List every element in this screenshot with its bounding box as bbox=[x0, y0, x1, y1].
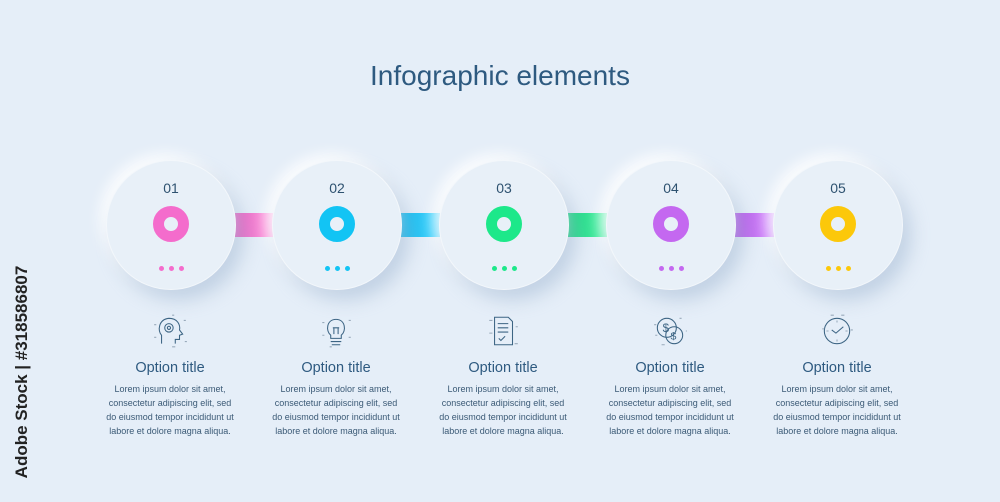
watermark side text: Adobe Stock | #318586807 bbox=[12, 266, 31, 478]
icon: coins: $ bbox=[671, 330, 677, 342]
connector 1-2 bbox=[233, 213, 275, 237]
option 1 text bbox=[106, 360, 234, 436]
step 04: 04 bbox=[663, 180, 679, 196]
step 01 bbox=[106, 160, 236, 290]
icon: bulb bbox=[322, 318, 351, 348]
text: Option title bbox=[135, 360, 205, 376]
text: Lorem ipsum dolor sit amet, consectetur adipiscing elit, sed do eiusmod tempor incididunt ut labore et dolore magna aliqua. bbox=[439, 384, 567, 436]
icon: coins bbox=[654, 318, 687, 346]
step 02: 02 bbox=[329, 180, 345, 196]
option 5 text bbox=[773, 360, 901, 436]
step 03: 03 bbox=[496, 180, 512, 196]
icon: document bbox=[489, 316, 518, 346]
step 04 bbox=[606, 160, 736, 290]
text: Lorem ipsum dolor sit amet, consectetur adipiscing elit, sed do eiusmod tempor incididunt ut labore et dolore magna aliqua. bbox=[606, 384, 734, 436]
text: Lorem ipsum dolor sit amet, consectetur adipiscing elit, sed do eiusmod tempor incididunt ut labore et dolore magna aliqua. bbox=[272, 384, 400, 436]
text: Lorem ipsum dolor sit amet, consectetur adipiscing elit, sed do eiusmod tempor incididunt ut labore et dolore magna aliqua. bbox=[773, 384, 901, 436]
icon: head gear bbox=[154, 314, 187, 348]
icon: clock bbox=[822, 314, 853, 344]
text: Option title bbox=[802, 360, 872, 376]
step 05: 05 bbox=[830, 180, 846, 196]
step 02 bbox=[272, 160, 402, 290]
text: Option title bbox=[301, 360, 371, 376]
text: Option title bbox=[468, 360, 538, 376]
title: Infographic elements bbox=[370, 60, 630, 91]
step 05 bbox=[773, 160, 903, 290]
text: Option title bbox=[635, 360, 705, 376]
connector 4-5 bbox=[733, 213, 775, 237]
step 01: 01 bbox=[163, 180, 179, 196]
option 2 text bbox=[272, 360, 400, 436]
icon: coins: $ bbox=[663, 322, 670, 335]
option 4 text bbox=[606, 360, 734, 436]
option 3 text bbox=[439, 360, 567, 436]
step 03 bbox=[439, 160, 569, 290]
text: Lorem ipsum dolor sit amet, consectetur adipiscing elit, sed do eiusmod tempor incididunt ut labore et dolore magna aliqua. bbox=[106, 384, 234, 436]
connector 3-4 bbox=[566, 213, 608, 237]
connector 2-3 bbox=[399, 213, 441, 237]
